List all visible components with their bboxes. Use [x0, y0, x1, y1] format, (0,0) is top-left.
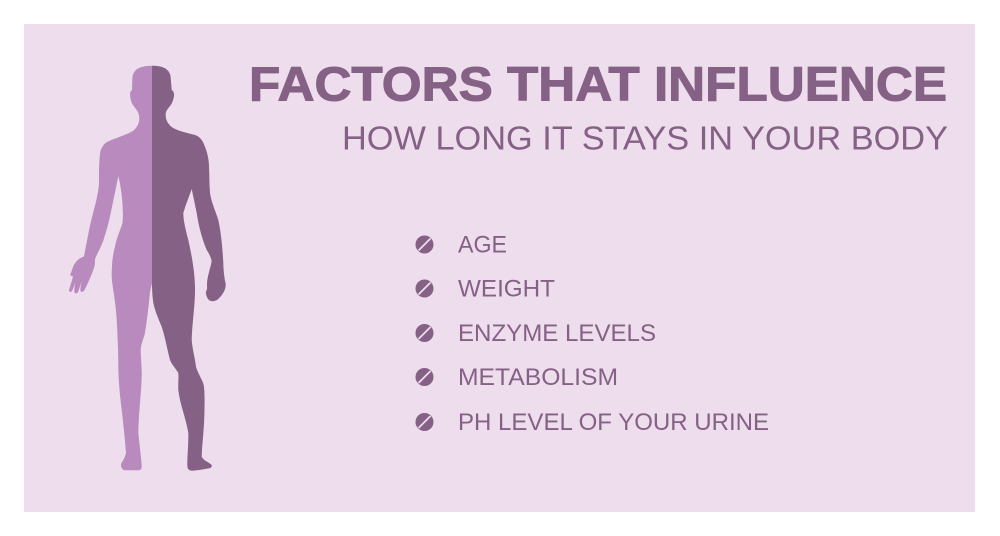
icon: pill	[416, 324, 434, 342]
label: METABOLISM	[458, 364, 618, 391]
icon: human body silhouette	[69, 66, 226, 471]
icon: pill	[416, 413, 434, 431]
label: WEIGHT	[458, 276, 555, 302]
icon: pill	[416, 368, 434, 386]
icon: pill	[416, 280, 434, 298]
subtitle: HOW LONG IT STAYS IN YOUR BODY	[342, 120, 948, 157]
label: PH LEVEL OF YOUR URINE	[458, 409, 769, 436]
label: AGE	[458, 231, 507, 258]
list item: enzyme levels	[416, 320, 656, 347]
list item: ph level	[416, 409, 769, 436]
list item: metabolism	[416, 364, 618, 391]
title: FACTORS THAT INFLUENCE	[249, 58, 947, 112]
list: factors	[416, 231, 769, 436]
icon: pill	[416, 236, 434, 254]
body left half	[69, 66, 152, 470]
list item: weight	[416, 276, 555, 302]
label: ENZYME LEVELS	[458, 320, 656, 347]
list item: age	[416, 231, 507, 258]
body right half	[152, 66, 226, 471]
